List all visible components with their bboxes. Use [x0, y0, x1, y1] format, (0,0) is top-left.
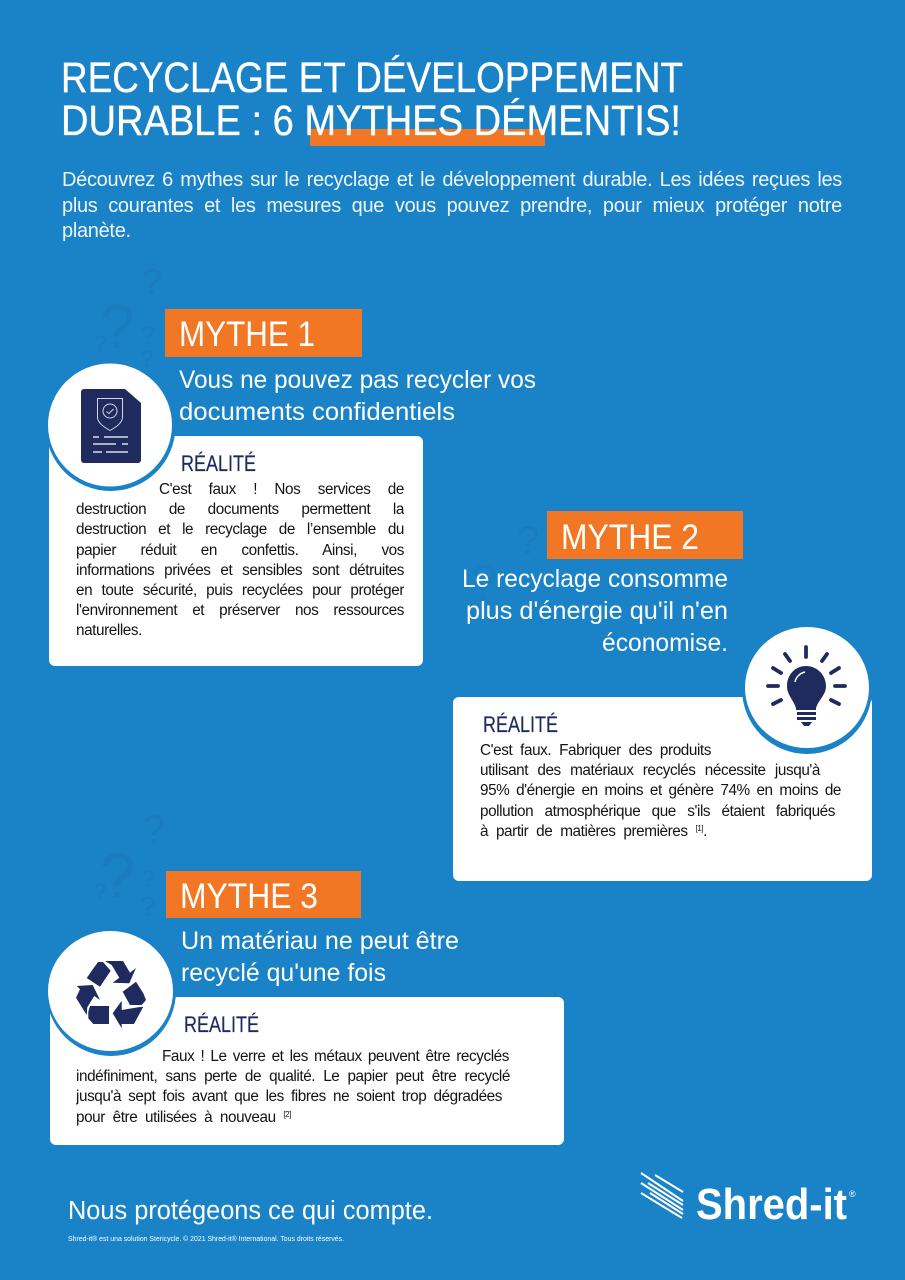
mythe 2 statement: Le recyclage consomme — [462, 565, 728, 593]
icon: light bulb — [742, 624, 872, 754]
decorative question marks 3: ? — [94, 879, 106, 904]
reality text 1: informations privées et sensibles sont détruites — [76, 562, 404, 579]
reality text 1 — [76, 480, 404, 644]
reality text 1: naturelles. — [76, 622, 142, 639]
mythe 1 label — [165, 309, 362, 357]
reality heading 3: RÉALITÉ — [184, 1012, 259, 1037]
reality text 2: utilisant des matériaux recyclés nécessite jusqu'à — [480, 762, 820, 779]
logo: Shred-it — [641, 1173, 856, 1229]
mythe 3 statement — [181, 927, 459, 987]
logo: Shred-it: Shred-it — [696, 1180, 847, 1229]
reality text 3: pour être utilisées à nouveau [2] — [76, 1109, 291, 1126]
intro text — [62, 168, 842, 246]
reality heading 1: RÉALITÉ — [181, 451, 256, 476]
mythe 1 statement: documents confidentiels — [179, 398, 455, 426]
mythe 2 statement: plus d'énergie qu'il n'en — [466, 597, 728, 625]
reality heading 2: RÉALITÉ — [483, 712, 558, 737]
reality text 2: 95% d'énergie en moins et génère 74% en moins de — [480, 782, 841, 799]
panel: mythe 1 — [46, 261, 536, 666]
decorative question marks 2: ? — [470, 555, 498, 611]
decorative question marks 3: ? — [142, 866, 154, 891]
decorative question marks 3: ? — [143, 808, 165, 852]
mythe 3 statement: recyclé qu'une fois — [181, 959, 386, 987]
intro text: planète. — [62, 220, 131, 242]
logo: Shred-it: ® — [849, 1189, 856, 1199]
mythe 2 label: MYTHE 2 — [561, 517, 699, 557]
title: DURABLE : 6 MYTHES DÉMENTIS! — [61, 97, 681, 145]
reality text 3: Faux ! Le verre et les métaux peuvent être recyclés — [162, 1048, 509, 1065]
mythe 1 statement — [179, 366, 536, 426]
reality text 3 — [76, 1047, 516, 1131]
slogan: Nous protégeons ce qui compte. — [68, 1197, 433, 1225]
reality text 3: jusqu'à sept fois avant que les fibres ne soient trop dégradées — [76, 1088, 502, 1105]
decorative question marks 3: ? — [100, 840, 136, 912]
decorative question marks 3: ? — [140, 891, 156, 922]
mythe 1 statement: Vous ne pouvez pas recycler vos — [179, 366, 536, 394]
intro text: Découvrez 6 mythes sur le recyclage et le développement durable. Les idées reçues les — [62, 169, 842, 191]
icon: confidential document — [46, 361, 176, 491]
reality text 1: l'environnement et préserver nos ressources — [76, 602, 404, 619]
reality text 1: C'est faux ! Nos services de — [159, 481, 404, 498]
panel: mythe 3 — [46, 808, 564, 1145]
title — [61, 54, 683, 146]
decorative question marks 3 — [94, 808, 165, 922]
panel: mythe 2 — [453, 511, 872, 881]
reality text 3: indéfiniment, sans perte de qualité. Le papier peut être recyclé — [76, 1068, 510, 1085]
decorative question marks 2 — [470, 519, 539, 611]
title highlight bar — [310, 129, 545, 146]
decorative question marks 1 — [94, 261, 162, 371]
decorative question marks 1: ? — [94, 331, 106, 356]
reality text 2: pollution atmosphérique que s'ils étaient fabriqués — [480, 803, 835, 820]
reality text 2: C'est faux. Fabriquer des produits — [480, 742, 711, 759]
mythe 3 statement: Un matériau ne peut être — [181, 927, 459, 955]
decorative question marks 1: ? — [141, 320, 155, 350]
mythe 1 label: MYTHE 1 — [179, 314, 315, 354]
reality text 1: en toute sécurité, puis recyclées pour protéger — [76, 582, 404, 599]
decorative question marks 1: ? — [141, 346, 153, 371]
mythe 2 statement — [462, 565, 728, 657]
mythe 3 label: MYTHE 3 — [180, 876, 318, 916]
mythe 2 statement: économise. — [602, 629, 728, 657]
title: RECYCLAGE ET DÉVELOPPEMENT — [61, 54, 683, 102]
reality text 2 — [480, 741, 845, 845]
reality card 3 — [50, 997, 564, 1145]
decorative question marks 2: ? — [517, 519, 539, 563]
mythe 2 label — [547, 511, 743, 559]
decorative question marks 1: ? — [142, 261, 162, 302]
decorative question marks 1: ? — [100, 293, 134, 362]
reality text 2: à partir de matières premières [1]. — [480, 823, 707, 840]
reality text 1: destruction et le recyclage de l’ensemble du — [76, 521, 404, 538]
reality text 1: destruction de documents permettent la — [76, 501, 404, 518]
reality card 1 — [49, 436, 423, 666]
mythe 3 label — [166, 871, 361, 918]
icon: recycling arrows — [46, 926, 176, 1056]
reality card 2 — [453, 697, 872, 881]
reality text 1: papier réduit en confettis. Ainsi, vos — [76, 542, 404, 559]
copyright note: Shred-it® est una solution Stericycle. © 2021 Shred-it® International. Tous droits réservés. — [68, 1234, 344, 1243]
intro text: plus courantes et les mesures que vous pouvez prendre, pour mieux protéger notre — [62, 194, 842, 216]
